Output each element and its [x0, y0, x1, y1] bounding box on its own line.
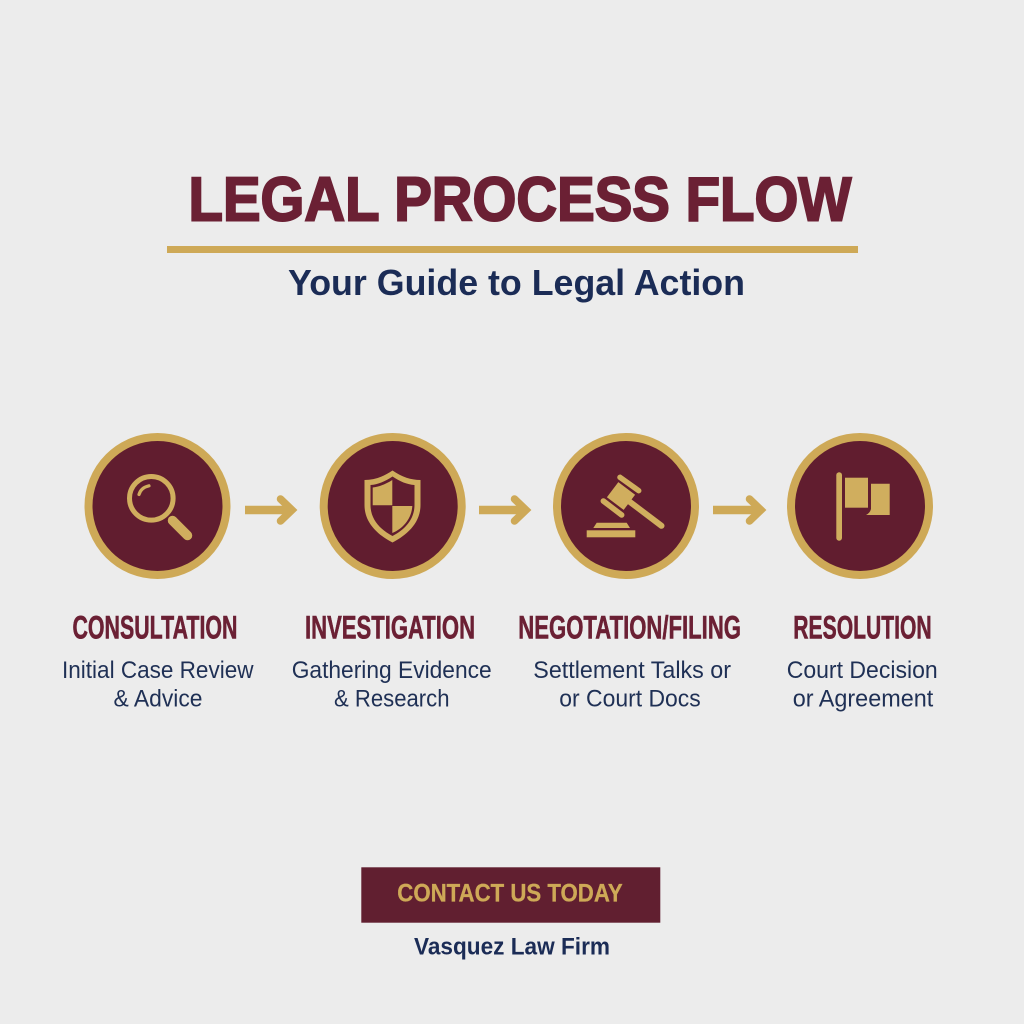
step 2 description: Gathering Evidence	[292, 657, 492, 684]
step 3 description: Settlement Talks or	[533, 657, 731, 684]
arrow 2	[479, 499, 526, 521]
arrow 3	[713, 499, 761, 521]
step 4 heading: RESOLUTION	[793, 609, 932, 646]
step 2 heading: INVESTIGATION	[305, 609, 475, 646]
step 1 heading: CONSULTATION	[72, 609, 237, 646]
step 3 badge	[557, 437, 695, 575]
step 1 description: & Advice	[114, 686, 202, 712]
step 1 description	[62, 657, 254, 712]
step 2 description: & Research	[334, 686, 450, 712]
step 2 badge	[324, 437, 462, 575]
step 1 description: Initial Case Review	[62, 657, 254, 684]
step 1: consultation	[62, 437, 254, 712]
step 2 description	[292, 657, 492, 712]
icon: gavel	[587, 477, 662, 537]
step 4 description: Court Decision	[787, 657, 938, 684]
step 4 description	[787, 657, 938, 712]
step 4 badge	[791, 437, 929, 575]
step 3: negotiation / filing	[518, 437, 741, 712]
step 3 description: or Court Docs	[559, 686, 701, 712]
arrow 1	[245, 499, 292, 521]
step 3 heading: NEGOTATION/FILING	[518, 609, 741, 646]
step 4 description: or Agreement	[793, 686, 934, 712]
step 1 badge	[88, 437, 226, 575]
call to action button: CONTACT US TODAY	[397, 879, 623, 908]
icon: shield	[364, 470, 420, 542]
subtitle: Your Guide to Legal Action	[288, 262, 745, 303]
firm name: Vasquez Law Firm	[414, 933, 610, 960]
icon: flag	[836, 472, 890, 541]
step 2: investigation	[292, 437, 492, 712]
step 4: resolution	[787, 437, 938, 712]
call to action button	[361, 867, 660, 923]
gold title rule	[167, 246, 858, 253]
title: LEGAL PROCESS FLOW	[188, 166, 852, 234]
step 3 description	[533, 657, 731, 712]
icon: magnifying glass	[130, 476, 188, 536]
